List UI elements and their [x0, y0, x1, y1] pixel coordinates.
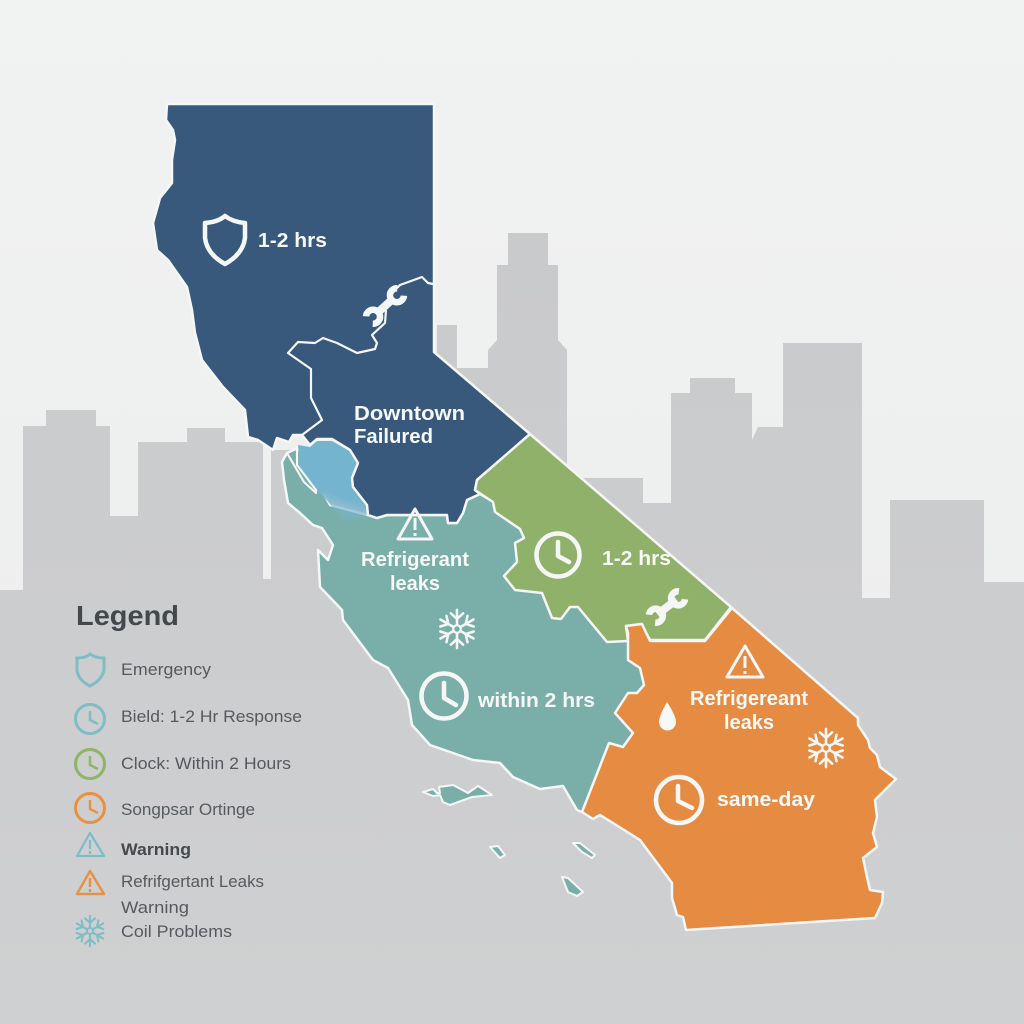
- southern region labels: [656, 646, 846, 823]
- region: southern orange: [582, 608, 896, 930]
- region: bay area water: [298, 441, 367, 522]
- navy inner boundary line: [288, 277, 433, 435]
- region: northern california navy: [153, 104, 530, 523]
- label: downtown failured: Failured: [354, 426, 433, 448]
- label: downtown failured: Downtown: [354, 403, 465, 425]
- region: central coast teal: [282, 448, 660, 812]
- label: refrigereant leaks south: Refrigereant: [690, 688, 808, 710]
- icon: water drop: [659, 702, 676, 730]
- legend: green clock: Clock: Within 2 Hours: [121, 754, 291, 773]
- legend: teal clock: Bield: 1-2 Hr Response: [121, 707, 302, 726]
- legend: snowflake coil problems: [74, 916, 232, 946]
- legend: green clock: [76, 750, 291, 778]
- label: within 2 hrs: within 2 hrs: [477, 690, 595, 712]
- legend: teal warning: [77, 833, 191, 859]
- bay peninsula outline: [287, 446, 316, 493]
- icon: shield: [205, 216, 245, 264]
- northern region labels: [205, 216, 465, 448]
- eastern region labels: [536, 534, 686, 624]
- label: refrigereant leaks south: leaks: [724, 712, 774, 734]
- city skyline and ground: [0, 233, 1024, 1024]
- legend: shield emergency: Emergency: [121, 660, 212, 679]
- channel islands: [423, 785, 595, 896]
- icon: snowflake central: [437, 610, 477, 648]
- label: refrigerant leaks central: Refrigerant: [361, 549, 469, 571]
- legend title: Legend: [76, 600, 179, 631]
- legend: [74, 600, 302, 946]
- legend: orange clock: Songpsar Ortinge: [121, 800, 255, 819]
- legend: orange warning: Refrifgertant Leaks: [121, 872, 264, 891]
- legend: teal clock: [76, 704, 302, 734]
- california map: [153, 104, 896, 930]
- label: same-day: same-day: [717, 789, 816, 811]
- label: 1-2 hrs north: 1-2 hrs: [258, 230, 327, 252]
- legend: snowflake coil problems: Coil Problems: [121, 922, 232, 941]
- icon: wrench north: [365, 287, 405, 325]
- icon: clock south: [656, 777, 702, 823]
- legend: orange warning: [77, 871, 264, 917]
- icon: snowflake south: [806, 729, 846, 767]
- legend: teal warning: Warning: [121, 840, 191, 859]
- icon: warning south: [727, 646, 763, 677]
- legend: orange clock: [76, 794, 255, 822]
- icon: clock central: [422, 674, 466, 718]
- central region labels: [361, 509, 595, 718]
- label: 1-2 hrs east: 1-2 hrs: [602, 548, 671, 570]
- icon: wrench east: [648, 590, 686, 624]
- icon: warning central: [398, 509, 432, 539]
- label: refrigerant leaks central: leaks: [390, 573, 440, 595]
- icon: clock east: [536, 534, 580, 576]
- region: eastern green: [475, 434, 731, 642]
- legend: orange warning: Warning: [121, 898, 189, 917]
- legend: shield emergency: [77, 654, 212, 686]
